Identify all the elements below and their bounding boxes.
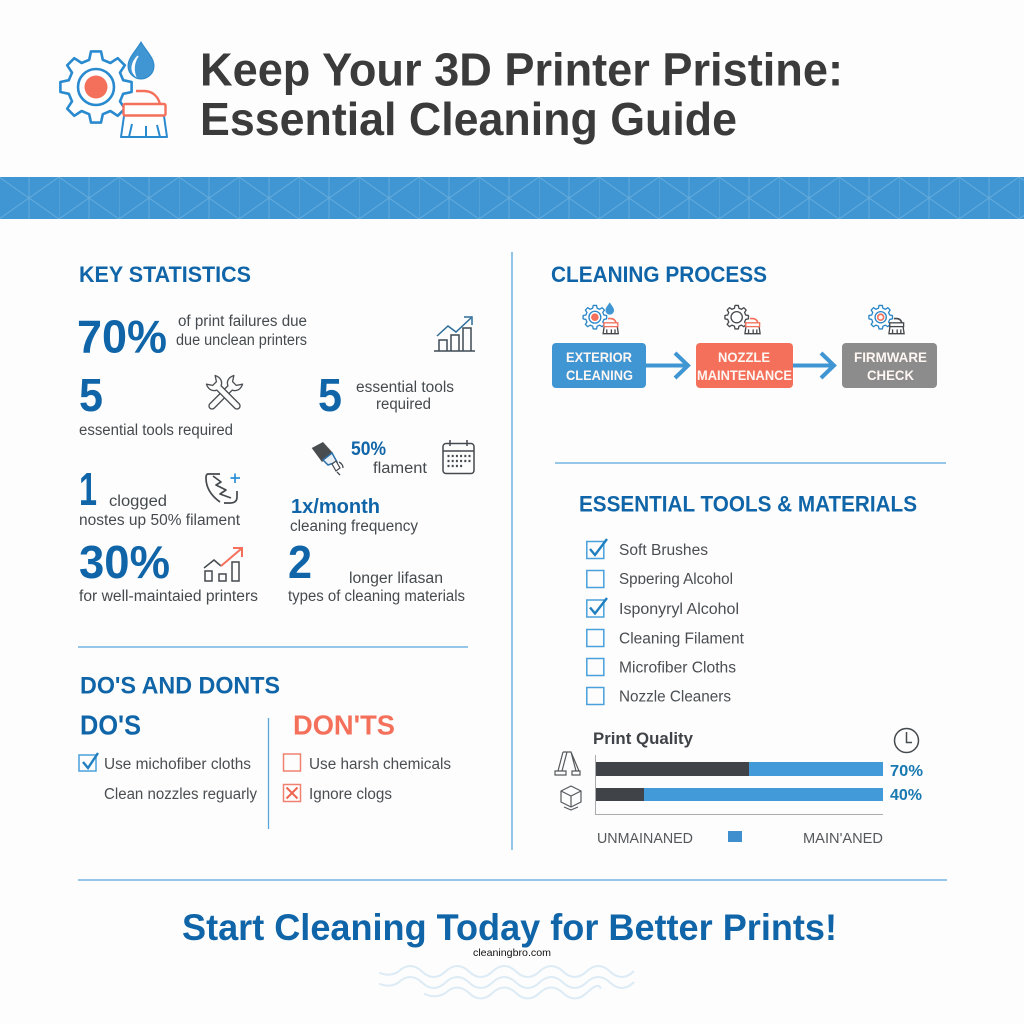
heading: key statistics: KEY STATISTICS (79, 262, 251, 287)
legend: UNMAINANED (597, 831, 693, 847)
don'ts column: Use harsh chemicals (309, 756, 451, 773)
checklist item: microfiber cloths: Microfiber Cloths (619, 660, 736, 676)
decorative waves (380, 966, 634, 998)
stat: once a month: 1x/month (291, 495, 380, 518)
step: exterior cleaning (552, 343, 646, 388)
icon: printer frame (555, 752, 580, 775)
step: firmware check: FIRMWARE (854, 349, 927, 365)
title (200, 44, 843, 145)
step: firmware check: CHECK (867, 367, 914, 383)
website label: cleaningbro.com (473, 947, 551, 959)
heading: cleaning process: CLEANING PROCESS (551, 262, 767, 287)
title: Essential Cleaning Guide (200, 93, 737, 145)
bar: unmaintained vs maintained 40 percent: 40% (890, 787, 922, 804)
step: exterior cleaning: CLEANING (566, 367, 633, 383)
icon: exterior cleaning (583, 302, 618, 334)
stat: 2 materials: longer lifasan (349, 570, 443, 587)
icon: rising bar chart (434, 317, 475, 351)
icon: cube (561, 786, 581, 810)
stat: once a month: cleaning frequency (290, 518, 418, 535)
stat: 70 percent print failures (77, 310, 307, 362)
don'ts column: Ignore clogs (309, 786, 392, 803)
don'ts column: DON'TS (293, 710, 395, 740)
icon: calendar (443, 440, 474, 474)
step: exterior cleaning: EXTERIOR (566, 349, 632, 365)
heading: essential tools and materials: ESSENTIAL TOOLS & MATERIALS (579, 492, 917, 516)
icon: clogged nozzle (206, 474, 240, 503)
stat: 5 tools left: 5 (79, 369, 103, 421)
icon: bars with red arrow (204, 548, 242, 581)
stat: 50 percent filament: 50% (351, 439, 386, 460)
checklist item: soft brushes (587, 539, 708, 559)
step: firmware check (842, 343, 937, 388)
stat: 30 percent (79, 536, 258, 605)
do's column: DO'S (80, 710, 141, 740)
stat: 5 tools right: required (376, 396, 431, 413)
bar: unmaintained vs maintained 70 percent (596, 762, 923, 780)
title: Keep Your 3D Printer Pristine: (200, 44, 843, 96)
stat: 1 clogged: 1 (79, 463, 97, 515)
panel: cleaning process (551, 262, 937, 388)
arrow: exterior to nozzle (646, 353, 688, 378)
stat: 30 percent: for well-maintaied printers (79, 588, 258, 605)
bar chart: print quality (555, 728, 923, 847)
stat: 5 tools left: essential tools required (79, 422, 233, 439)
don'ts column (284, 710, 451, 803)
legend: MAIN'ANED (803, 831, 883, 847)
stat: 50 percent filament: flament (373, 460, 428, 477)
heading: do's and don'ts: DO'S AND DONTS (80, 672, 280, 700)
do's column: Use michofiber cloths (104, 756, 251, 773)
stat: 1 clogged: clogged (109, 493, 167, 510)
do's column: Clean nozzles reguarly (104, 786, 257, 803)
header banner (0, 177, 1024, 219)
bar: unmaintained vs maintained 70 percent: 70% (890, 763, 923, 780)
icon: firmware check (869, 305, 904, 334)
checklist item: isopropyl alcohol: Isponyryl Alcohol (619, 601, 739, 618)
stat: 1 clogged (79, 463, 241, 529)
stat: 70 percent print failures: 70% (77, 310, 167, 362)
stat: 2 materials: 2 (288, 536, 312, 588)
checklist item: nozzle cleaners: Nozzle Cleaners (619, 688, 731, 706)
chart title: Print Quality (593, 729, 694, 748)
stat: 2 materials (288, 536, 465, 605)
checklist item: spoering alcohol: Spɒering Alcohol (619, 571, 733, 588)
stat: once a month (290, 495, 418, 535)
step: nozzle maintenance (696, 343, 793, 388)
panel: essential tools and materials (579, 492, 917, 706)
stat: 5 tools right (318, 369, 454, 421)
arrow: nozzle to firmware (793, 353, 834, 378)
stat: 2 materials: types of cleaning materials (288, 588, 465, 605)
stat: 50 percent filament (351, 439, 428, 477)
call to action: Start Cleaning Today for Better Prints! (182, 907, 837, 948)
do's column (79, 710, 257, 803)
stat: 70 percent print failures: due unclean printers (176, 332, 307, 349)
checklist item: isopropyl alcohol (587, 598, 739, 618)
step: nozzle maintenance: NOZZLE (718, 349, 770, 365)
bar: unmaintained vs maintained 40 percent (596, 787, 922, 804)
checklist item: soft brushes: Soft Brushes (619, 542, 708, 559)
legend (597, 831, 883, 847)
stat: 1 clogged: nostes up 50% filament (79, 512, 241, 529)
panel: key statistics (77, 262, 475, 605)
icon: gear, water drop and brush logo (60, 42, 167, 137)
panel: do's and don'ts (79, 672, 451, 829)
icon: crossed wrenches (205, 375, 244, 413)
stat: 5 tools right: essential tools (356, 379, 454, 396)
icon: nozzle maintenance (725, 305, 760, 334)
icon: clock (894, 728, 918, 752)
stat: 30 percent: 30% (79, 536, 170, 588)
step: nozzle maintenance: MAINTENANCE (697, 367, 792, 383)
stat: 5 tools left (79, 369, 233, 439)
icon: nozzle brush (312, 442, 343, 475)
stat: 70 percent print failures: of print failures due (178, 313, 307, 330)
checklist item: cleaning filament: Cleaning Filament (619, 630, 745, 648)
stat: 5 tools right: 5 (318, 369, 342, 421)
